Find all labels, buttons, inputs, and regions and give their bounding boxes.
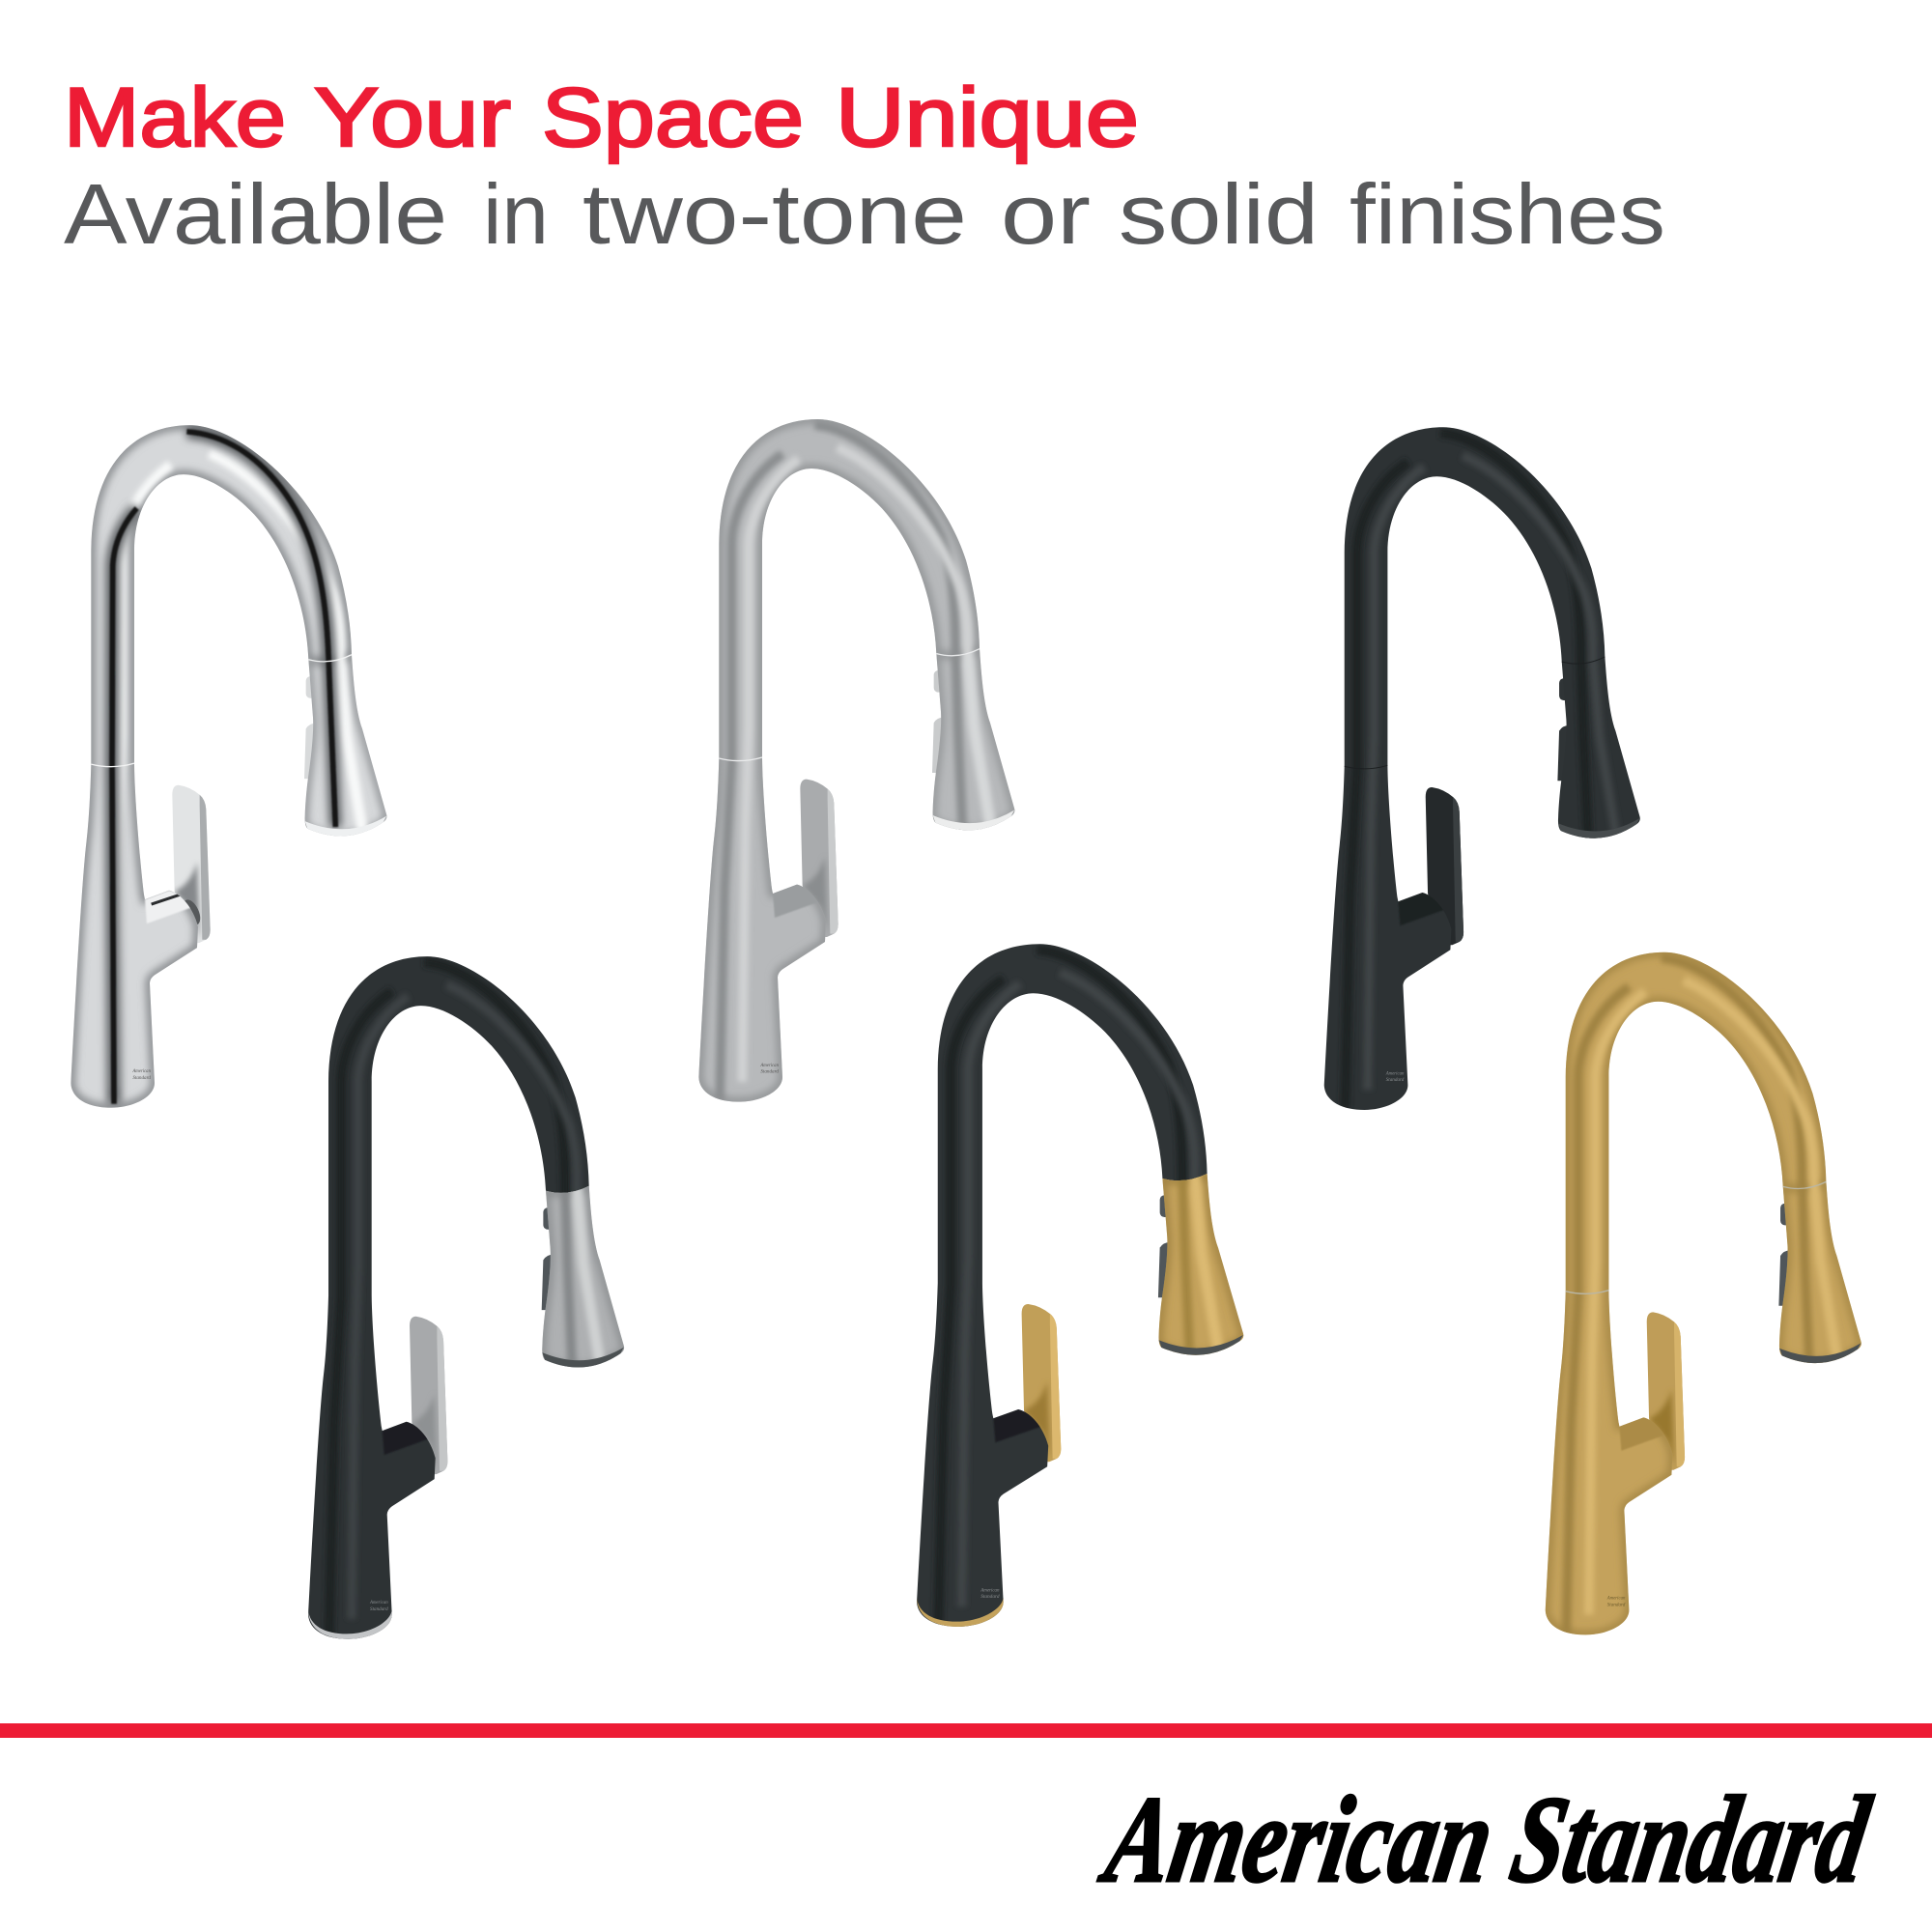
subtitle — [64, 166, 1665, 262]
base logo: American — [369, 1600, 388, 1605]
spray head — [305, 655, 386, 837]
faucet: black with stainless head — [308, 956, 624, 1639]
spray buttons — [1778, 1204, 1791, 1306]
base logo: Standard — [132, 1075, 151, 1081]
base logo: Standard — [980, 1594, 1000, 1600]
lever handle — [800, 780, 838, 937]
faucet: brushed gold — [1546, 952, 1861, 1634]
base logo — [1385, 1070, 1405, 1083]
base logo — [131, 1068, 151, 1081]
title — [64, 71, 1139, 164]
base logo: Standard — [1607, 1602, 1626, 1607]
spray buttons — [304, 676, 316, 779]
spray head — [542, 1186, 624, 1368]
spray buttons — [542, 1208, 554, 1310]
lever handle — [1647, 1312, 1685, 1470]
subtitle: solid — [1119, 166, 1319, 262]
lever handle — [1426, 787, 1463, 945]
faucet: matte black — [1324, 427, 1640, 1110]
seams — [91, 655, 352, 767]
base logo — [369, 1600, 388, 1612]
base logo: American — [759, 1063, 779, 1068]
base ring — [917, 1598, 1004, 1627]
spout and body — [917, 944, 1218, 1627]
title: Make — [64, 71, 286, 164]
base logo — [759, 1063, 779, 1075]
base logo — [1606, 1596, 1626, 1607]
lever handle — [1022, 1304, 1061, 1462]
base logo: American — [1385, 1070, 1405, 1076]
base logo: Standard — [370, 1606, 388, 1612]
brand logo — [1093, 1771, 1880, 1908]
spray buttons — [932, 670, 944, 773]
faucet: brushed nickel — [698, 419, 1014, 1102]
red divider bar — [0, 1723, 1932, 1738]
faucet: black with gold head — [917, 944, 1243, 1627]
base ring — [308, 1610, 392, 1639]
spray buttons — [1158, 1195, 1171, 1297]
base logo: American — [980, 1587, 1000, 1593]
title: Space — [542, 71, 804, 164]
spray head — [933, 649, 1014, 831]
lever handle — [410, 1317, 447, 1474]
spray head — [1779, 1182, 1861, 1364]
spout and body — [698, 419, 990, 1102]
spray buttons — [1557, 678, 1570, 781]
subtitle: finishes — [1350, 166, 1665, 262]
base logo: American — [1606, 1596, 1626, 1602]
base logo: Standard — [760, 1069, 779, 1075]
spout and body — [308, 956, 600, 1639]
subtitle: or — [1001, 166, 1091, 262]
subtitle: Available — [64, 166, 447, 262]
seams — [1566, 1181, 1826, 1293]
base logo: American — [131, 1068, 151, 1074]
spout and body — [1324, 427, 1615, 1110]
faucet: polished chrome — [71, 425, 386, 1108]
brand logo: American — [1093, 1771, 1503, 1908]
spout and body — [71, 425, 362, 1108]
spray head — [1557, 657, 1640, 838]
title: Your — [314, 71, 511, 164]
subtitle: two-tone — [582, 166, 967, 262]
spout and body — [1546, 952, 1836, 1634]
subtitle: in — [483, 166, 549, 262]
seams — [719, 649, 980, 761]
base logo — [980, 1587, 1000, 1600]
seams — [1345, 657, 1605, 769]
base logo: Standard — [1386, 1077, 1405, 1083]
lever handle — [172, 785, 211, 943]
spray head — [1159, 1174, 1244, 1355]
title: Unique — [836, 71, 1139, 164]
